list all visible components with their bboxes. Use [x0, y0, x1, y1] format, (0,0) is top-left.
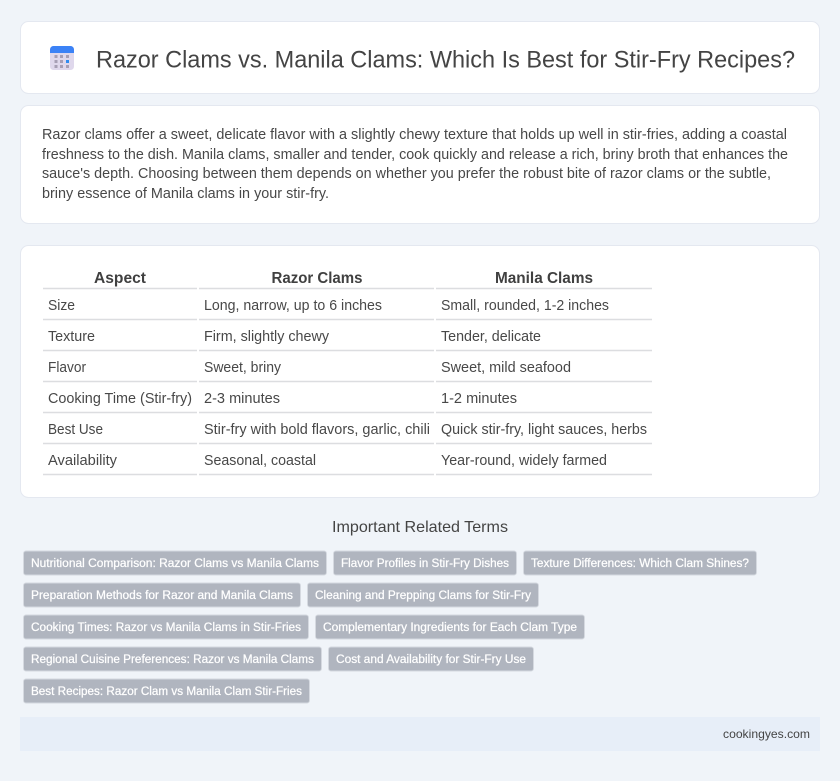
tags: related terms: Complementary Ingredients for Each Clam Type: [323, 620, 577, 634]
row: availability: [48, 453, 607, 469]
text block: introduction: briny essence of Manila clams in your stir-fry.: [42, 186, 329, 202]
row: texture: Tender, delicate: [441, 329, 541, 345]
tags: related terms: Cooking Times: Razor vs Manila Clams in Stir-Fries: [31, 620, 301, 634]
footer: [20, 717, 820, 751]
tags: related terms: Nutritional Comparison: Razor Clams vs Manila Clams: [31, 556, 319, 570]
row: best use: Best Use: [48, 422, 103, 438]
row: flavor: [48, 360, 571, 376]
row: flavor: Sweet, briny: [204, 360, 282, 376]
panel: header: [20, 22, 820, 94]
tags: related terms: Cost and Availability for Stir-Fry Use: [336, 652, 526, 666]
row: flavor: Flavor: [48, 360, 86, 376]
tags: related terms: Best Recipes: Razor Clam vs Manila Clam Stir-Fries: [31, 684, 302, 698]
row: cooking time: 2-3 minutes: [204, 391, 280, 407]
title: Razor Clams vs. Manila Clams: Which Is Best for Stir-Fry Recipes?: [96, 46, 795, 74]
text block: introduction: freshness to the dish. Manila clams, smaller and tender, cook quickly and release a rich, briny broth that enhances the: [42, 147, 788, 163]
heading: related terms: Important Related Terms: [332, 519, 508, 536]
table header: Manila Clams: [495, 270, 593, 287]
row: best use: Quick stir-fry, light sauces, herbs: [441, 422, 647, 438]
footer: cookingyes.com: [723, 727, 810, 741]
tags: related terms: Regional Cuisine Preferences: Razor vs Manila Clams: [31, 652, 314, 666]
row: size: Small, rounded, 1-2 inches: [441, 298, 609, 314]
row: texture: Firm, slightly chewy: [204, 329, 330, 345]
row: cooking time: 1-2 minutes: [441, 391, 517, 407]
panel: comparison table: [20, 246, 820, 498]
row: availability: Availability: [48, 453, 118, 469]
text block: introduction: sauce's depth. Choosing between them depends on whether you prefer the robust bite of razor clams or the subtle,: [42, 166, 771, 182]
row: size: Long, narrow, up to 6 inches: [204, 298, 382, 314]
row: cooking time: Cooking Time (Stir-fry): [48, 391, 192, 407]
tags: related terms: Flavor Profiles in Stir-Fry Dishes: [341, 556, 509, 570]
tags: related terms: Texture Differences: Which Clam Shines?: [531, 556, 749, 570]
row: availability: Seasonal, coastal: [204, 453, 316, 469]
tags: related terms: [24, 551, 756, 703]
table header: Aspect: [94, 270, 146, 287]
table header: [94, 270, 593, 287]
row: cooking time: [48, 391, 517, 407]
row: availability: Year-round, widely farmed: [441, 453, 607, 469]
panel: introduction: [20, 106, 820, 224]
row: flavor: Sweet, mild seafood: [441, 360, 571, 376]
row: size: [48, 298, 609, 314]
tags: related terms: Preparation Methods for Razor and Manila Clams: [31, 588, 293, 602]
table header: Razor Clams: [272, 270, 362, 287]
icon: calendar: [50, 46, 74, 70]
text block: introduction: Razor clams offer a sweet, delicate flavor with a slightly chewy texture that holds up well in stir-fries, adding a coastal: [42, 127, 787, 143]
text block: introduction: [42, 127, 788, 202]
row: best use: Stir-fry with bold flavors, garlic, chili: [204, 422, 430, 438]
row: texture: Texture: [48, 329, 95, 345]
row: best use: [48, 422, 647, 438]
row: size: Size: [48, 298, 75, 314]
row: texture: [48, 329, 541, 345]
tags: related terms: Cleaning and Prepping Clams for Stir-Fry: [315, 588, 532, 602]
